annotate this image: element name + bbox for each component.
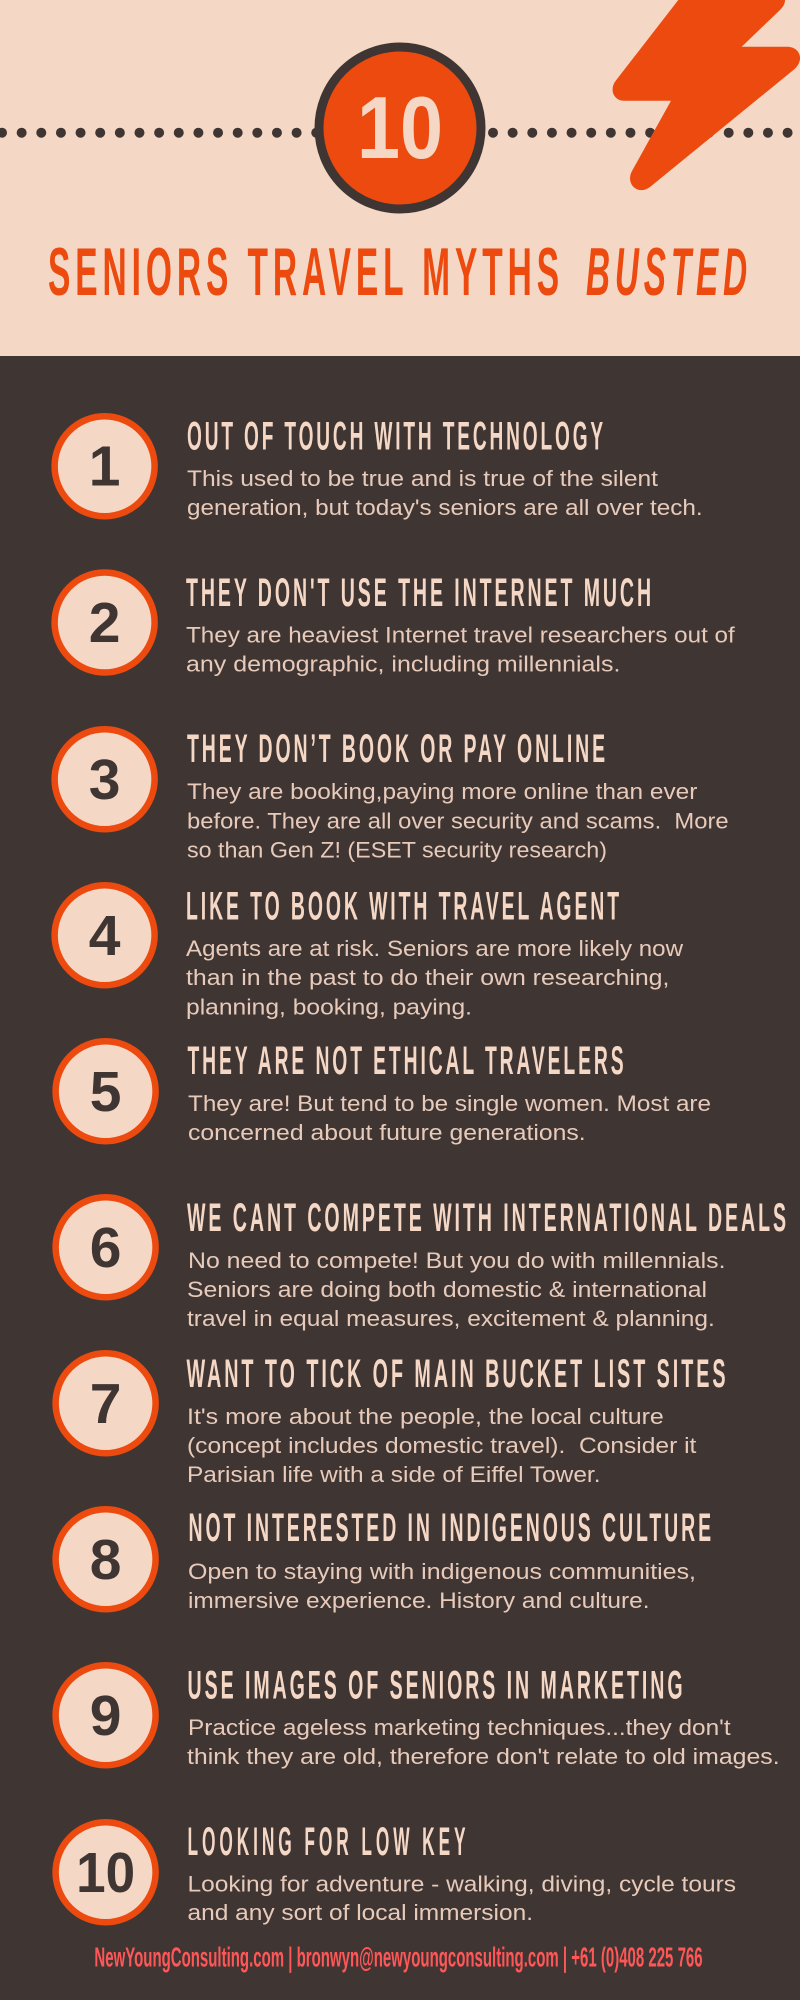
body 5: concerned about future generations. [188,1120,586,1145]
dotted line [2,128,800,138]
body 5: They are! But tend to be single women. Most are [188,1091,711,1116]
body 4: planning, booking, paying. [186,994,472,1019]
myth 10 [56,1820,736,1925]
body 4: than in the past to do their own researching, [186,965,669,990]
myth 5 [56,1039,711,1145]
body 3: They are booking,paying more online than ever [187,779,697,804]
body 6: Seniors are doing both domestic & international [187,1277,707,1302]
myth 4 [55,884,683,1019]
myth 1 [55,414,703,520]
badge: number 10 in header: 10 [357,78,443,177]
body 3 [187,779,729,862]
number badge 8: 8 [90,1528,121,1592]
number badge 8 [56,1509,156,1609]
body 4 [186,936,683,1019]
number badge 1 [55,416,155,516]
body 1: generation, but today's seniors are all over tech. [187,495,703,520]
number badge 4 [55,885,155,985]
myth 7 [56,1352,729,1487]
body 6: No need to compete! But you do with millennials. [188,1248,726,1273]
number badge 7 [56,1353,156,1453]
myth 8 [56,1506,714,1613]
body 1: This used to be true and is true of the silent [187,466,658,491]
body 7: Parisian life with a side of Eiffel Tower. [187,1462,600,1487]
badge: number 10 in header [319,47,481,209]
body 2: They are heaviest Internet travel researchers out of [186,623,736,648]
body 9: think they are old, therefore don't relate to old images. [187,1744,780,1769]
body 3: so than Gen Z! (ESET security research) [187,837,607,862]
myth 9 [56,1663,780,1769]
number badge 5: 5 [90,1060,121,1124]
number badge 10 [56,1822,156,1922]
body 7 [187,1404,696,1487]
body 3: before. They are all over security and scams. More [187,808,729,833]
body 5 [188,1091,711,1145]
number badge 5 [56,1041,156,1141]
body 1 [187,466,703,520]
number badge 2 [55,572,155,672]
myth 3 [55,727,729,862]
body 8 [188,1559,696,1613]
number badge 6 [56,1197,156,1297]
number badge 6: 6 [90,1216,121,1280]
number badge 3 [55,729,155,829]
body 7: It's more about the people, the local culture [187,1404,664,1429]
myth 6 [56,1196,789,1331]
body 2 [186,623,736,677]
body 6: travel in equal measures, excitement & planning. [187,1306,715,1331]
number badge 7: 7 [90,1372,121,1436]
number badge 10: 10 [76,1841,135,1905]
number badge 9: 9 [90,1684,121,1748]
body 7: (concept includes domestic travel). Consider it [187,1433,696,1458]
body 9 [187,1715,780,1769]
body 8: immersive experience. History and culture. [188,1588,650,1613]
number badge 2: 2 [89,591,120,655]
body 6 [187,1248,726,1331]
body 4: Agents are at risk. Seniors are more likely now [186,936,683,961]
body 10: Looking for adventure - walking, diving, cycle tours [188,1871,736,1896]
icon: lightning bolt [613,0,800,190]
body 2: any demographic, including millennials. [186,652,620,677]
panel: header background [0,0,800,356]
body 10 [188,1871,736,1925]
myth 2 [55,571,736,677]
number badge 4: 4 [89,904,121,968]
body 8: Open to staying with indigenous communities, [188,1559,696,1584]
body 10: and any sort of local immersion. [188,1900,533,1925]
number badge 9 [56,1665,156,1765]
body 9: Practice ageless marketing techniques...they don't [188,1715,731,1740]
number badge 3: 3 [89,748,120,812]
number badge 1: 1 [89,434,120,498]
